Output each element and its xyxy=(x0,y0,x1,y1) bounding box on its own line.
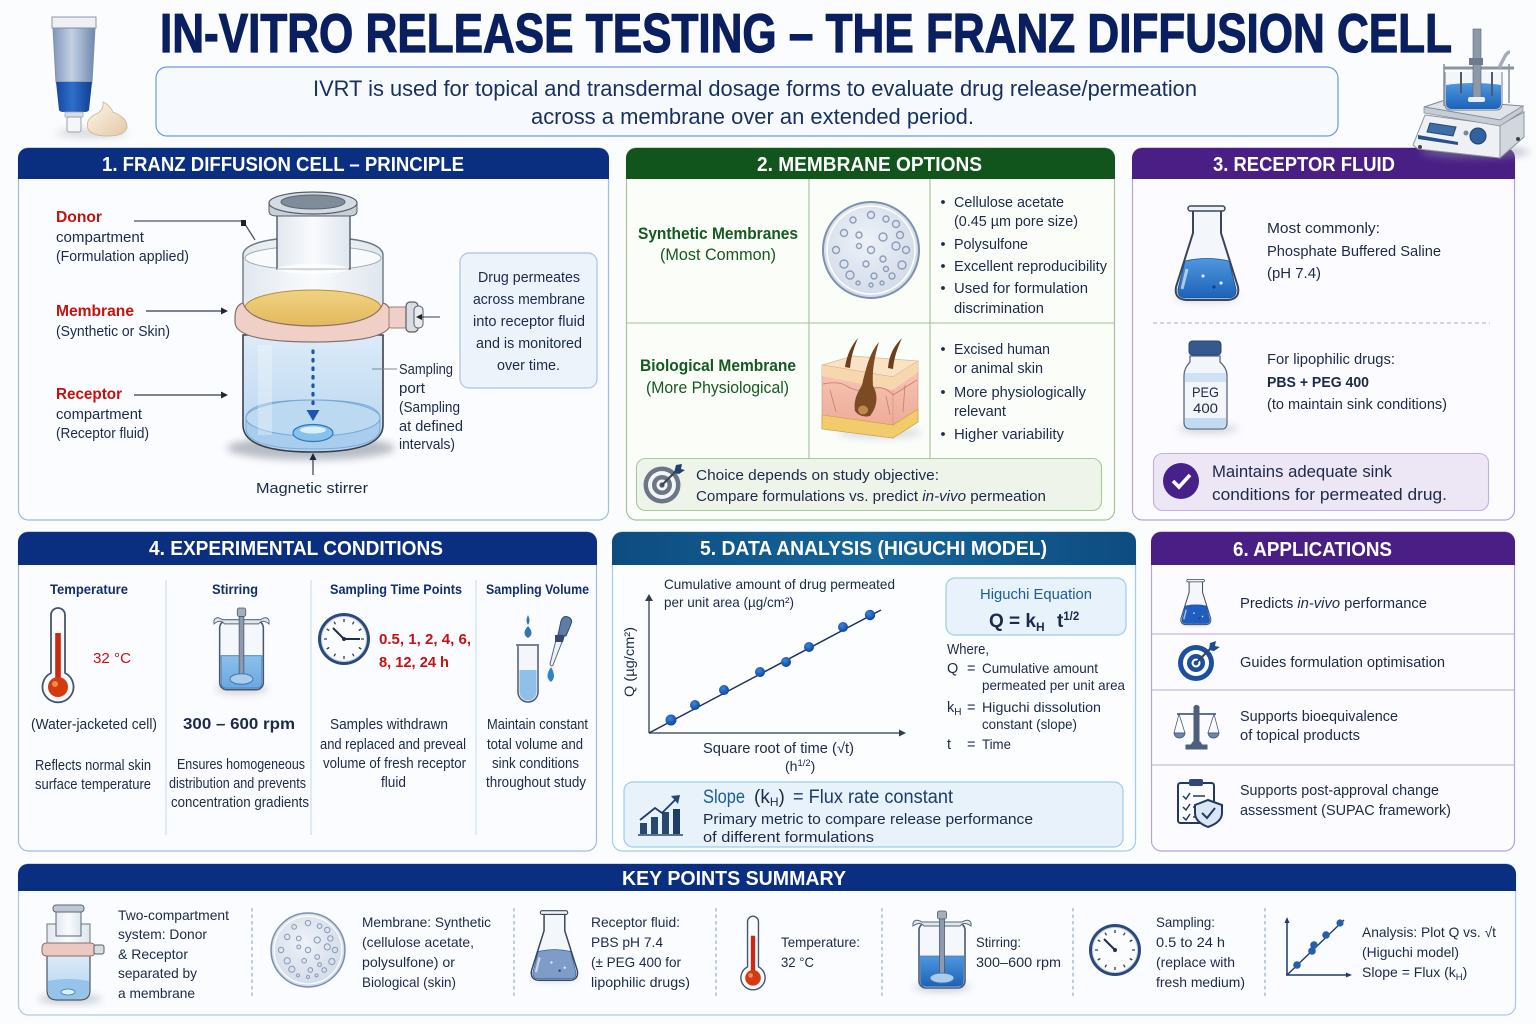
item: sampling xyxy=(1089,914,1245,990)
text: synthetic membranes: Synthetic Membranes xyxy=(638,225,798,243)
heading: panel 6: 6. APPLICATIONS xyxy=(1233,538,1392,561)
callout: slope xyxy=(624,782,1123,847)
text: lipophilic drugs: PBS + PEG 400 xyxy=(1267,374,1369,391)
callout: drug permeates: Drug permeates xyxy=(478,270,580,286)
list: synthetic membrane properties: Used for formulation xyxy=(954,281,1088,297)
icon: mini plot xyxy=(1284,917,1352,978)
icon: magnetic stirrer apparatus xyxy=(1413,29,1530,158)
list: synthetic membrane properties: Excellent reproducibility xyxy=(954,259,1108,275)
column: sampling time points: fluid xyxy=(381,775,406,791)
panel: 2. Membrane options xyxy=(626,148,1115,520)
panel: 1. Franz diffusion cell principle xyxy=(18,148,609,520)
list: synthetic membrane properties: discrimination xyxy=(954,301,1044,317)
column: sampling time points: 0.5, 1, 2, 4, 6, xyxy=(379,631,471,648)
label: membrane xyxy=(56,303,170,340)
list: biological membrane properties: relevant xyxy=(954,404,1006,420)
list: synthetic membrane properties: Polysulfone xyxy=(954,237,1028,253)
list: biological membrane properties xyxy=(941,342,1087,443)
icon: target xyxy=(644,464,685,504)
item: membrane: Biological (skin) xyxy=(362,974,456,990)
text: most common receptor xyxy=(1267,220,1441,282)
callout: sink conditions: conditions for permeated drug. xyxy=(1212,485,1447,504)
item: stirring: 300–600 rpm xyxy=(976,954,1061,970)
item: two-compartment system: Two-compartment xyxy=(118,907,229,923)
subtitle box: IVRT is used for topical and transdermal dosage forms to evaluate drug release/permeation xyxy=(313,76,1197,101)
text: biological membrane: Biological Membrane xyxy=(640,357,796,375)
chart: Q vs root t: Square root of time (√t) xyxy=(703,741,854,757)
item: analysis: H xyxy=(1456,972,1463,983)
text: equation legend: Time xyxy=(982,736,1011,752)
callout: drug permeates: across membrane xyxy=(473,292,585,308)
callout: drug permeates: over time. xyxy=(497,358,560,374)
item: receptor fluid xyxy=(531,911,690,990)
list: biological membrane properties: More physiologically xyxy=(954,385,1087,401)
item: two-compartment system: separated by xyxy=(118,965,197,981)
label: magnetic stirrer: Magnetic stirrer xyxy=(256,480,368,497)
column: temperature: Temperature xyxy=(50,581,128,597)
column: sampling volume: throughout study xyxy=(486,775,587,791)
text: equation legend xyxy=(947,642,1125,753)
panel: 5. Data analysis xyxy=(612,532,1136,851)
column: sampling volume: sink conditions xyxy=(492,756,579,772)
text: equation legend: = xyxy=(967,661,975,677)
label: receptor compartment: (Receptor fluid) xyxy=(56,426,149,442)
icon: check xyxy=(1163,463,1199,499)
item: stirring: Stirring: xyxy=(976,934,1021,950)
chart: Q vs root t: Cumulative amount of drug permeated xyxy=(664,576,895,592)
column: temperature: Reflects normal skin xyxy=(35,758,151,774)
callout: drug permeates: and is monitored xyxy=(476,336,582,352)
item: membrane xyxy=(271,913,491,990)
text: equation legend: constant (slope) xyxy=(982,716,1077,732)
item: bioequivalence xyxy=(1174,705,1398,749)
item: stirring xyxy=(913,911,1061,992)
item: sampling: Sampling: xyxy=(1156,914,1215,930)
item: sampling: (replace with xyxy=(1156,954,1235,970)
label: membrane: (Synthetic or Skin) xyxy=(56,324,170,340)
item: membrane: (cellulose acetate, xyxy=(362,934,474,950)
callout: slope: Primary metric to compare release performance xyxy=(703,811,1033,828)
chart: Q vs root t: (h xyxy=(785,758,797,774)
list: synthetic membrane properties: Cellulose acetate xyxy=(954,195,1064,211)
item: receptor fluid: lipophilic drugs) xyxy=(591,974,690,990)
text: equation legend: Cumulative amount xyxy=(982,660,1098,676)
icon: dropper and test tube xyxy=(516,615,572,702)
list: biological membrane properties: Excised human xyxy=(954,342,1050,358)
callout: choice depends on study objective: Compare formulations vs. predict in-vivo permeation xyxy=(696,488,1046,505)
item: receptor fluid: PBS pH 7.4 xyxy=(591,934,663,950)
label: sampling port: at defined xyxy=(399,419,463,435)
item: temperature: Temperature: xyxy=(781,934,860,950)
text: equation legend: H xyxy=(954,707,961,718)
icon: mini Franz cell xyxy=(38,905,104,1003)
text: equation legend: Higuchi dissolution xyxy=(982,699,1101,715)
arrow: receptor xyxy=(134,392,228,398)
heading: key points xyxy=(18,864,1516,891)
box: Higuchi equation: Q = k xyxy=(989,611,1036,632)
label: magnetic stirrer xyxy=(256,453,368,497)
text: equation legend: k xyxy=(947,700,954,716)
label: sampling port: (Sampling xyxy=(399,400,460,416)
arrow: port leader xyxy=(416,314,440,320)
list: biological membrane properties: Higher variability xyxy=(954,427,1065,443)
icon: flask with PBS xyxy=(1175,206,1239,302)
chart: Q vs root t xyxy=(621,576,906,774)
item: temperature xyxy=(741,916,860,990)
text: equation legend: Where, xyxy=(947,642,989,658)
chart: Q vs root t: Q (µg/cm²) xyxy=(621,627,637,697)
item: sampling: fresh medium) xyxy=(1156,974,1245,990)
heading: panel 2 xyxy=(626,148,1115,179)
item: analysis: ) xyxy=(1463,964,1467,980)
heading: key points: KEY POINTS SUMMARY xyxy=(622,867,846,890)
callout: choice depends on study objective: Choice depends on study objective: xyxy=(696,467,939,484)
icon: growth bars xyxy=(638,795,683,835)
text: lipophilic drugs xyxy=(1267,351,1447,413)
text: lipophilic drugs: (to maintain sink conditions) xyxy=(1267,396,1447,413)
column: stirring: 300 – 600 rpm xyxy=(183,716,295,733)
column: sampling time points: Sampling Time Points xyxy=(330,581,462,597)
column: sampling time points: Samples withdrawn xyxy=(330,717,448,733)
item: analysis: Analysis: Plot Q vs. √t xyxy=(1362,924,1496,940)
heading: panel 1 xyxy=(18,148,609,179)
heading: panel 1: 1. FRANZ DIFFUSION CELL – PRINCIPLE xyxy=(102,153,464,176)
column: sampling volume: total volume and xyxy=(487,737,583,753)
item: SUPAC xyxy=(1178,779,1451,827)
label: donor compartment xyxy=(56,209,189,265)
text: biological membrane xyxy=(640,357,796,397)
heading: panel 5 xyxy=(612,532,1136,565)
label: sampling port: intervals) xyxy=(399,437,455,453)
text: equation legend: Q xyxy=(947,661,958,677)
panel: 6. Applications xyxy=(1151,532,1515,851)
item: temperature: 32 °C xyxy=(781,954,814,970)
list: synthetic membrane properties: (0.45 µm pore size) xyxy=(954,214,1078,230)
label: membrane: Membrane xyxy=(56,303,134,320)
column: sampling time points: and replaced and preveal xyxy=(320,737,466,753)
item: receptor fluid: Receptor fluid: xyxy=(591,914,680,930)
icon: thermometer xyxy=(42,608,74,702)
icon: PEG 400 vial: 400 xyxy=(1193,400,1218,416)
item: two-compartment system: & Receptor xyxy=(118,946,188,962)
item: membrane: Membrane: Synthetic xyxy=(362,914,491,930)
item: formulation optimisation xyxy=(1178,641,1445,681)
column: sampling time points: 8, 12, 24 h xyxy=(379,654,449,671)
column: stirring: concentration gradients xyxy=(171,795,309,811)
heading: panel 5: 5. DATA ANALYSIS (HIGUCHI MODEL) xyxy=(700,537,1047,560)
text: biological membrane: (More Physiological) xyxy=(646,379,789,397)
diagram: Franz cell xyxy=(227,192,423,460)
item: SUPAC: assessment (SUPAC framework) xyxy=(1240,803,1451,819)
chart: Q vs root t: 1/2 xyxy=(797,758,811,769)
column: stirring xyxy=(169,581,309,811)
heading: panel 4 xyxy=(18,532,597,565)
callout: drug permeates xyxy=(460,253,597,388)
text: equation legend: permeated per unit area xyxy=(982,677,1125,693)
column: sampling time points: volume of fresh receptor xyxy=(323,756,466,772)
column: stirring: Ensures homogeneous xyxy=(177,757,305,773)
item: sampling: 0.5 to 24 h xyxy=(1156,934,1225,950)
icon: clock xyxy=(318,613,370,665)
item: SUPAC: Supports post-approval change xyxy=(1240,783,1439,799)
subtitle box xyxy=(156,67,1338,136)
text: equation legend: = xyxy=(967,737,975,753)
icon: synthetic membrane disc xyxy=(823,202,919,298)
callout: slope: H xyxy=(770,795,778,809)
panel: 3. Receptor fluid xyxy=(1132,148,1515,520)
item: analysis xyxy=(1284,917,1496,983)
panel: 4. Experimental conditions xyxy=(18,532,597,851)
item: membrane: polysulfone) or xyxy=(362,954,455,970)
box: Higuchi equation: 1/2 xyxy=(1063,611,1079,623)
icon: PEG 400 vial xyxy=(1178,341,1238,433)
item: bioequivalence: of topical products xyxy=(1240,728,1360,744)
text: equation legend: t xyxy=(947,737,951,753)
item: predicts in-vivo performance xyxy=(1180,579,1427,626)
item: formulation optimisation: Guides formulation optimisation xyxy=(1240,655,1445,671)
text: synthetic membranes xyxy=(638,225,798,264)
item: predicts in-vivo performance: Predicts in-vivo performance xyxy=(1240,596,1427,612)
label: donor compartment: (Formulation applied) xyxy=(56,249,189,265)
item: two-compartment system: system: Donor xyxy=(118,926,207,942)
arrow: membrane xyxy=(146,308,228,314)
text: most common receptor: (pH 7.4) xyxy=(1267,265,1321,282)
text: synthetic membranes: (Most Common) xyxy=(660,246,776,264)
label: receptor compartment: Receptor xyxy=(56,386,122,403)
text: most common receptor: Phosphate Buffered Saline xyxy=(1267,243,1441,260)
column: temperature: (Water-jacketed cell) xyxy=(31,717,157,733)
list: synthetic membrane properties xyxy=(941,195,1108,317)
text: equation legend: = xyxy=(967,700,975,716)
item: two-compartment system xyxy=(38,905,229,1003)
item: bioequivalence: Supports bioequivalence xyxy=(1240,709,1398,725)
column: temperature: surface temperature xyxy=(35,777,151,793)
icon: PEG 400 vial: PEG xyxy=(1192,384,1219,400)
icon: skin cross-section xyxy=(822,338,922,438)
text: most common receptor: Most commonly: xyxy=(1267,220,1380,237)
label: donor compartment: compartment xyxy=(56,230,144,246)
column: temperature: 32 °C xyxy=(93,650,131,667)
arrow: donor leader xyxy=(134,220,255,240)
item: receptor fluid: (± PEG 400 for xyxy=(591,954,681,970)
text: lipophilic drugs: For lipophilic drugs: xyxy=(1267,351,1395,368)
column: stirring: distribution and prevents xyxy=(169,776,306,792)
heading: panel 2: 2. MEMBRANE OPTIONS xyxy=(757,153,982,176)
item: analysis: (Higuchi model) xyxy=(1362,944,1459,960)
column: stirring: Stirring xyxy=(212,581,258,597)
label: sampling port: port xyxy=(399,381,425,397)
callout: slope: (k xyxy=(754,787,770,808)
column: sampling volume: Sampling Volume xyxy=(486,581,589,597)
box: Higuchi equation: t xyxy=(1057,611,1064,632)
callout: slope: = Flux rate constant xyxy=(793,787,954,808)
callout: slope: of different formulations xyxy=(703,829,874,846)
label: sampling port xyxy=(372,362,463,453)
heading: panel 3: 3. RECEPTOR FLUID xyxy=(1213,153,1395,176)
panel: key points summary xyxy=(18,864,1516,1015)
box: Higuchi equation xyxy=(946,578,1126,635)
column: sampling volume xyxy=(486,581,589,791)
column: sampling volume: Maintain constant xyxy=(487,717,588,733)
label: sampling port: Sampling xyxy=(399,362,453,378)
item: two-compartment system: a membrane xyxy=(118,985,195,1001)
label: receptor compartment: compartment xyxy=(56,407,142,423)
chart: Q vs root t: per unit area (µg/cm²) xyxy=(664,594,794,610)
item: analysis: Slope = Flux (k xyxy=(1362,964,1456,980)
callout: drug permeates: into receptor fluid xyxy=(473,314,585,330)
icon: ointment tube with cream xyxy=(52,17,128,137)
chart: Q vs root t: ) xyxy=(811,758,815,774)
box: Higuchi equation: Higuchi Equation xyxy=(980,586,1092,603)
column: temperature xyxy=(31,581,157,793)
heading: panel 3 xyxy=(1132,148,1515,179)
label: donor compartment: Donor xyxy=(56,209,102,226)
column: sampling time points xyxy=(318,581,471,791)
callout: slope: ) xyxy=(778,787,785,808)
heading: panel 6 xyxy=(1151,532,1515,565)
subtitle box: across a membrane over an extended period. xyxy=(531,104,974,129)
callout: sink conditions: Maintains adequate sink xyxy=(1212,462,1392,481)
list: biological membrane properties: or animal skin xyxy=(954,361,1043,377)
callout: choice depends on study objective xyxy=(636,458,1102,510)
box: Higuchi equation: H xyxy=(1036,620,1045,634)
label: receptor compartment xyxy=(56,386,149,442)
callout: slope: Slope xyxy=(703,787,745,808)
heading: panel 4: 4. EXPERIMENTAL CONDITIONS xyxy=(149,537,443,560)
callout: sink conditions xyxy=(1154,454,1488,510)
icon: stirred beaker xyxy=(214,608,269,693)
